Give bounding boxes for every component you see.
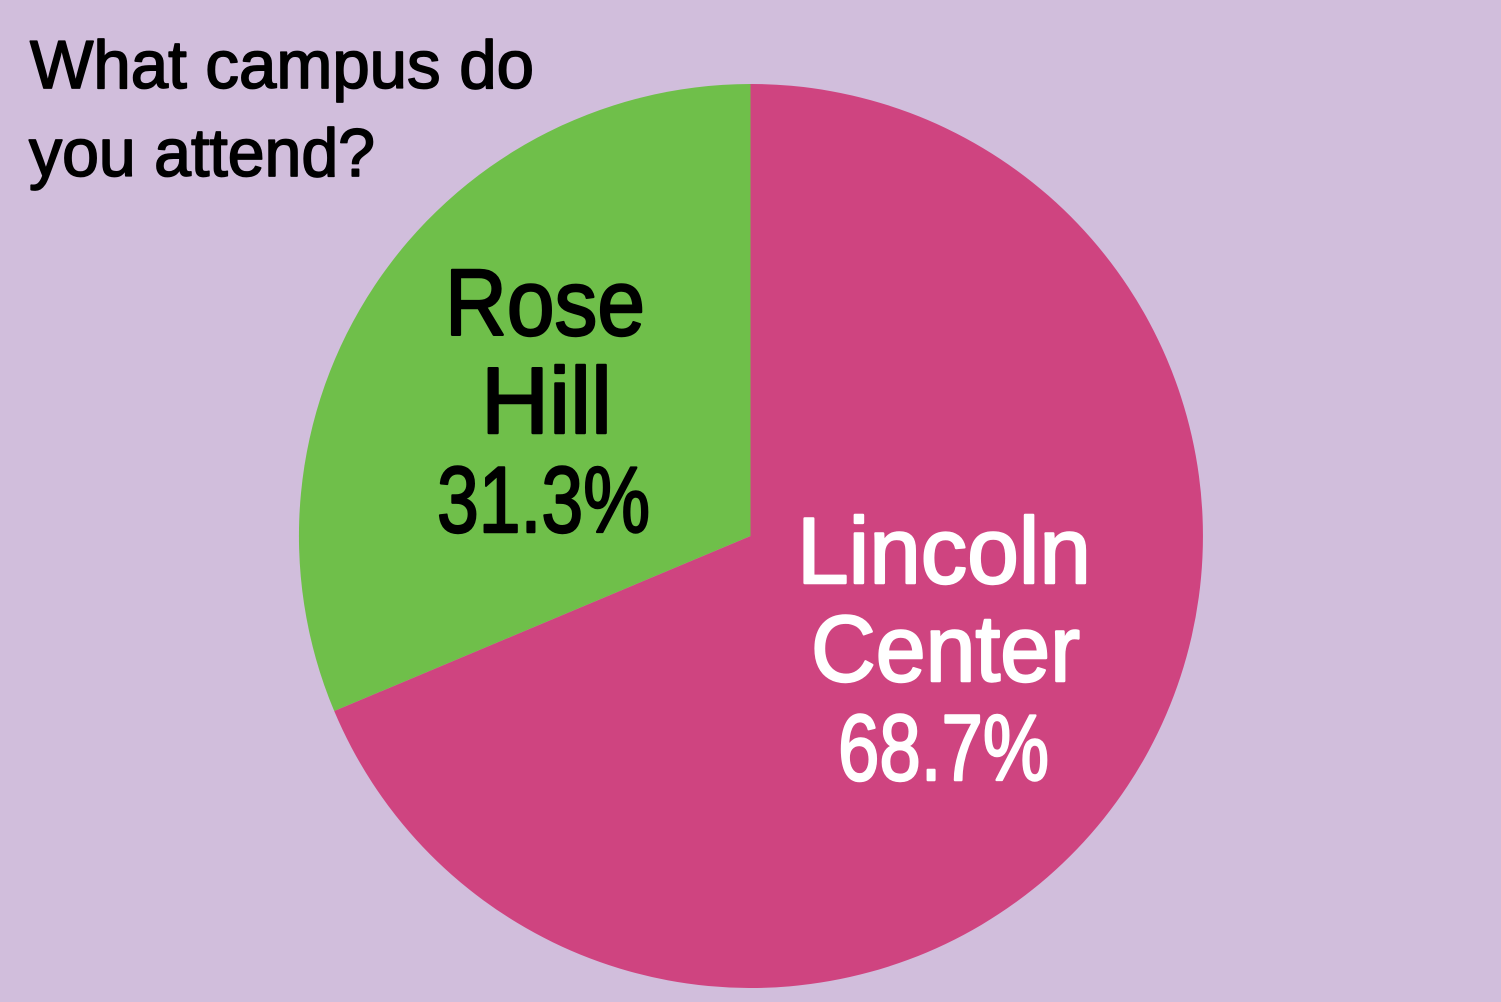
label: Rose Hill 31.3%: 31.3% — [437, 447, 650, 552]
label: Rose Hill 31.3%: Hill — [481, 348, 612, 453]
slice: Lincoln Center 68.7% — [334, 84, 1203, 988]
title: What campus do you attend?: What campus do — [30, 27, 534, 103]
pie chart — [299, 84, 1203, 988]
label: Rose Hill 31.3%: Rose — [445, 250, 645, 355]
title: What campus do you attend? — [29, 27, 534, 191]
title: What campus do you attend?: you attend? — [29, 115, 375, 191]
label: Lincoln Center 68.7%: Center — [811, 596, 1080, 701]
label: Lincoln Center 68.7% — [797, 498, 1091, 800]
slice: Rose Hill 31.3% — [299, 84, 750, 711]
label: Lincoln Center 68.7%: 68.7% — [838, 695, 1049, 800]
label: Lincoln Center 68.7%: Lincoln — [797, 498, 1091, 603]
label: Rose Hill 31.3% — [437, 250, 650, 552]
